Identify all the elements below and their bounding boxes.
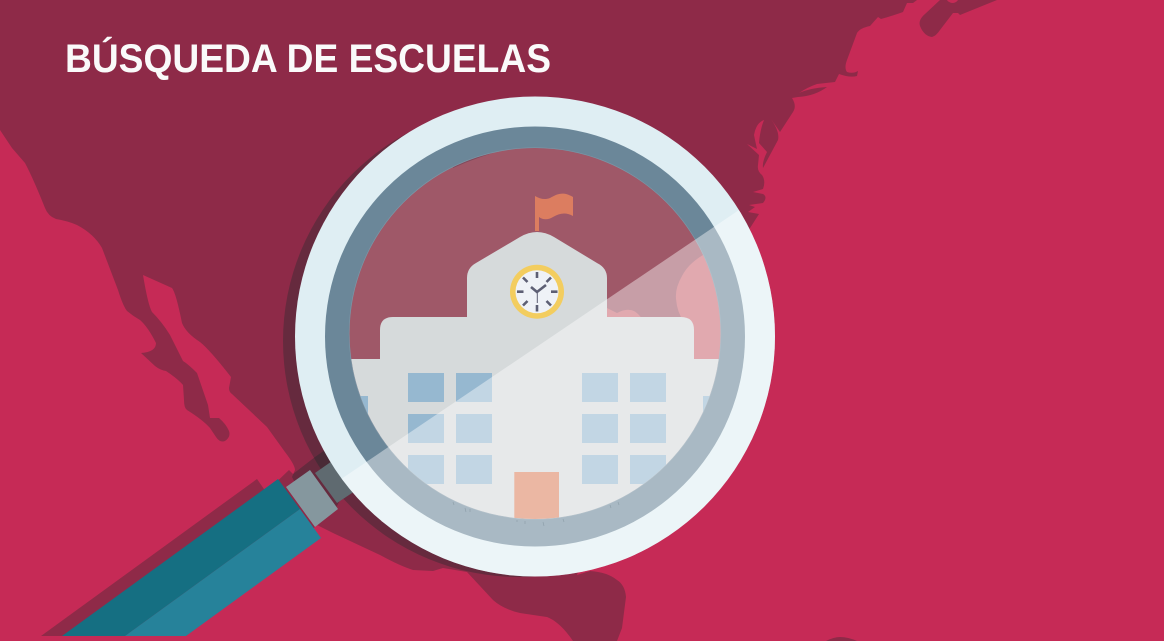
flag bbox=[535, 194, 573, 231]
handle grip dark half bbox=[62, 479, 300, 636]
map: Nova Scotia island bbox=[920, 0, 997, 37]
magnified coast bbox=[607, 255, 720, 359]
lens drop shadow bbox=[283, 132, 532, 577]
clock face bbox=[516, 270, 558, 313]
wing joint line bbox=[379, 359, 382, 479]
clock rim bbox=[510, 265, 564, 319]
school building bbox=[351, 194, 719, 519]
map: dark landmass bbox=[0, 0, 917, 641]
handle drop shadow bbox=[41, 450, 345, 636]
lens outer rim bbox=[295, 96, 775, 576]
map: small landmass at bottom bbox=[826, 637, 857, 641]
clock hands bbox=[531, 285, 546, 303]
magnifier handle bbox=[62, 459, 358, 636]
central tower bbox=[467, 232, 607, 320]
windows bbox=[360, 373, 710, 484]
side wings bbox=[351, 359, 719, 518]
diagonal glare bbox=[342, 210, 775, 576]
clock bbox=[510, 265, 564, 319]
magnified land bbox=[350, 148, 703, 434]
lens inner ring bbox=[325, 126, 745, 546]
clock ticks bbox=[517, 272, 558, 312]
magnifying lens bbox=[295, 96, 775, 576]
ring inner hairline bbox=[349, 148, 721, 519]
main block bbox=[380, 317, 694, 530]
title: BÚSQUEDA DE ESCUELAS bbox=[65, 35, 551, 81]
door bbox=[514, 472, 559, 519]
hair marks on ring bbox=[453, 502, 619, 526]
handle connector bbox=[315, 462, 352, 503]
lens glass scene bbox=[350, 148, 720, 519]
handle collar bbox=[286, 470, 338, 527]
glass top edge shadow bbox=[453, 153, 492, 168]
handle grip light half bbox=[125, 509, 321, 636]
